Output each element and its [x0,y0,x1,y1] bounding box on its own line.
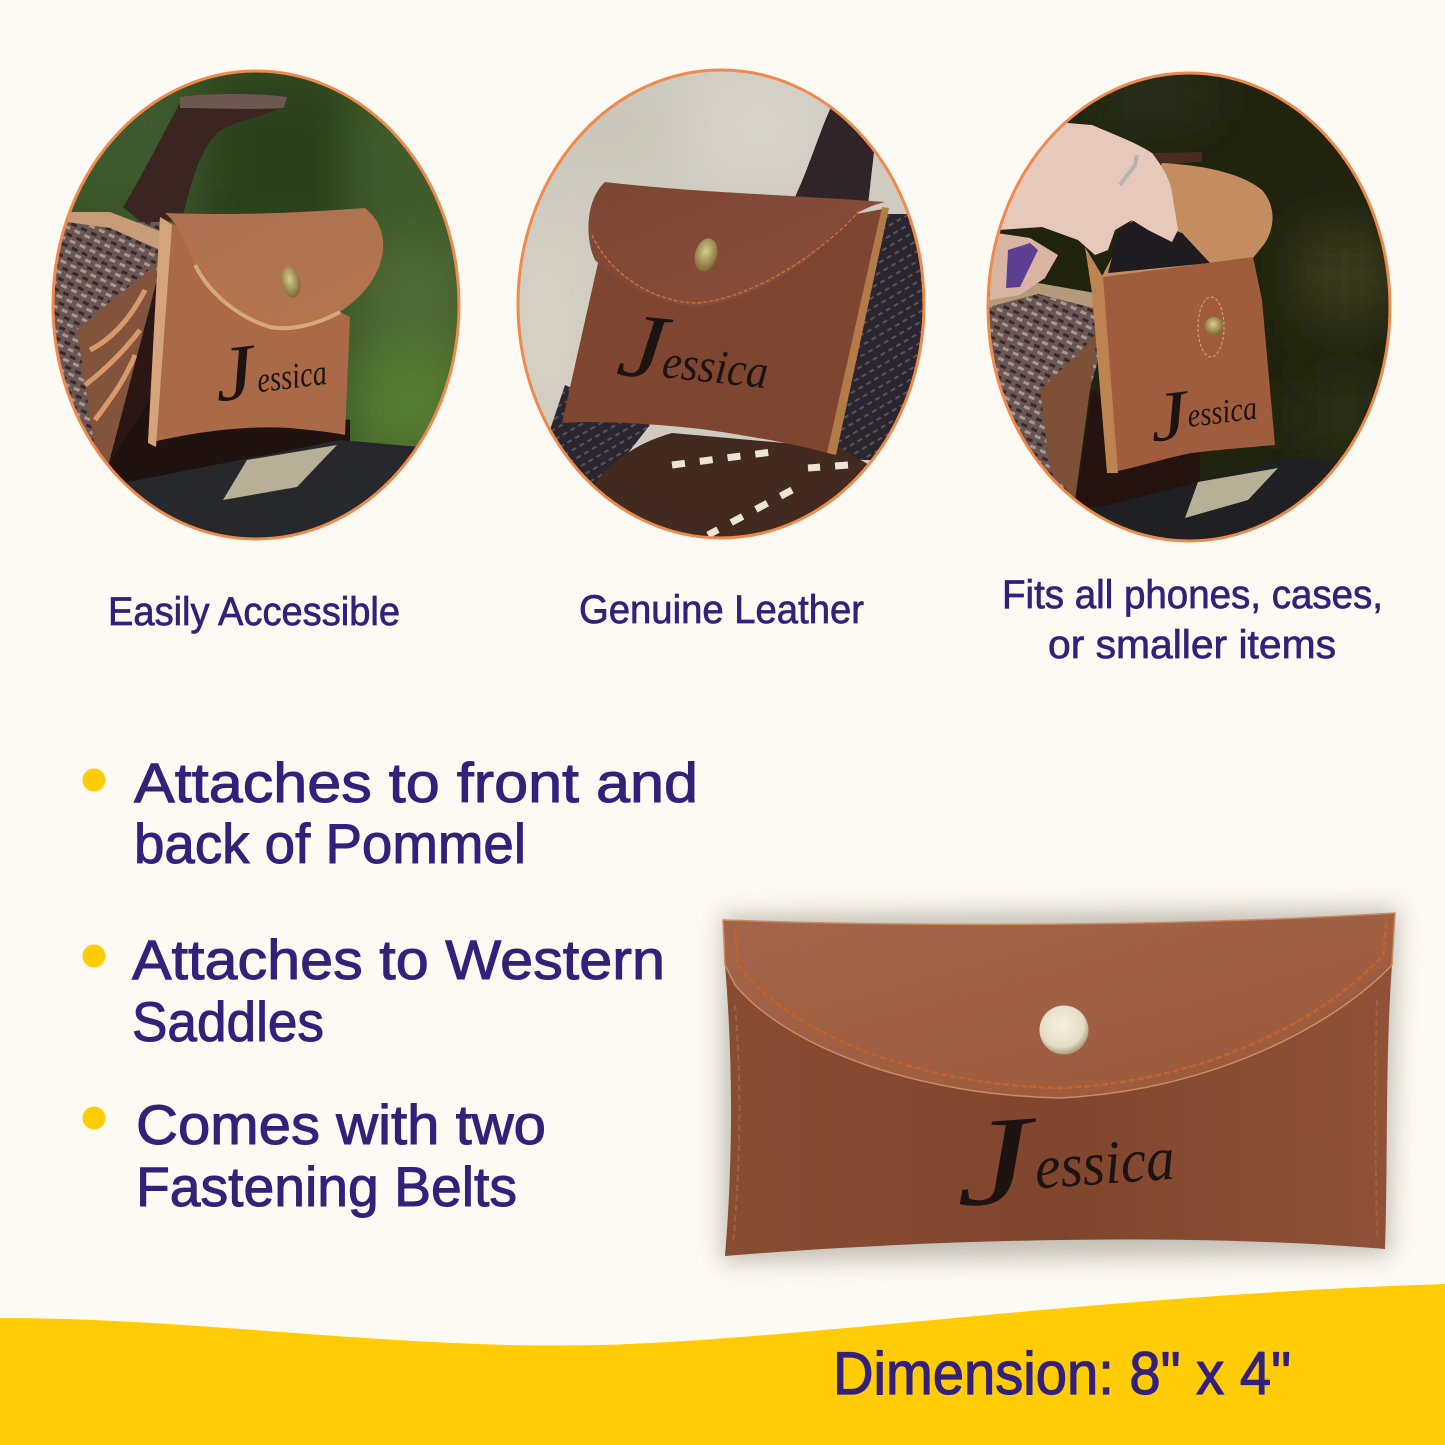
bullet: attaches to pommel: back of Pommel [134,812,526,875]
phone [1108,217,1210,273]
pouch body [1085,247,1275,473]
engraved name: J [1145,376,1195,457]
product photo: large pouch [722,908,1398,1262]
bullet: fastening belts: Fastening Belts [136,1155,517,1218]
bullet: western saddles [82,928,665,1053]
pouch back [725,965,1392,1256]
hand [990,122,1178,255]
engraved name: essica [1185,390,1259,435]
engraved name: essica [255,352,329,400]
snap [1198,297,1224,357]
saddle horn cap [1150,152,1202,165]
bullet: western saddles: Saddles [132,990,324,1053]
open flap suede [1100,163,1273,280]
caption: fits all phones [1002,573,1383,667]
engraved name [1153,391,1256,442]
tooled saddle lower [550,385,650,484]
tooled saddle [985,283,1200,510]
tooled saddle [54,212,160,464]
photo circle: easily accessible [52,70,460,540]
pouch body [562,207,889,455]
engraved name: essica [1032,1125,1177,1202]
shadow [722,908,1398,1262]
caption: fits all phones: or smaller items [1048,623,1336,667]
pouch body [148,217,350,447]
dimension text: Dimension: 8" x 4" [833,1340,1291,1407]
bullet: fastening belts [82,1093,546,1218]
saddle blanket [126,440,416,538]
photo circle: genuine leather [510,60,935,550]
pouch flap [588,182,885,307]
engraved name: J [613,293,676,400]
caption: genuine leather: Genuine Leather [579,588,864,632]
flap stitching [735,918,1387,1088]
engraved name: essica [660,335,771,399]
bullet: fastening belts: Comes with two [136,1093,546,1156]
engraved name [950,1081,1179,1234]
engraved name [218,345,326,401]
tooled saddle right [828,214,922,460]
suede stitching [672,452,848,535]
saddle horn [795,105,875,205]
engraved name: J [950,1090,1045,1234]
saddle blanket [1091,457,1338,540]
pouch flap [165,208,383,328]
bullet: western saddles: Attaches to Western [132,928,665,991]
shadow under pouch [109,400,350,482]
engraved name: J [209,327,263,418]
pouch flap [723,913,1395,1098]
snap [282,266,300,298]
photo circle: fits phones [980,60,1400,560]
saddle horn [123,94,287,230]
bullet: attaches to pommel [82,751,698,875]
arm and wrist band [990,232,1058,300]
engraved name [616,317,768,388]
side stitching [733,1000,1377,1245]
snap [1040,1006,1088,1054]
snap [694,238,718,272]
bullet: attaches to pommel: Attaches to front and [134,751,698,814]
caption: easily accessible: Easily Accessible [108,590,400,634]
suede skirt [594,433,868,536]
yellow wave footer [0,1284,1445,1445]
caption: fits all phones: Fits all phones, cases, [1002,573,1383,617]
